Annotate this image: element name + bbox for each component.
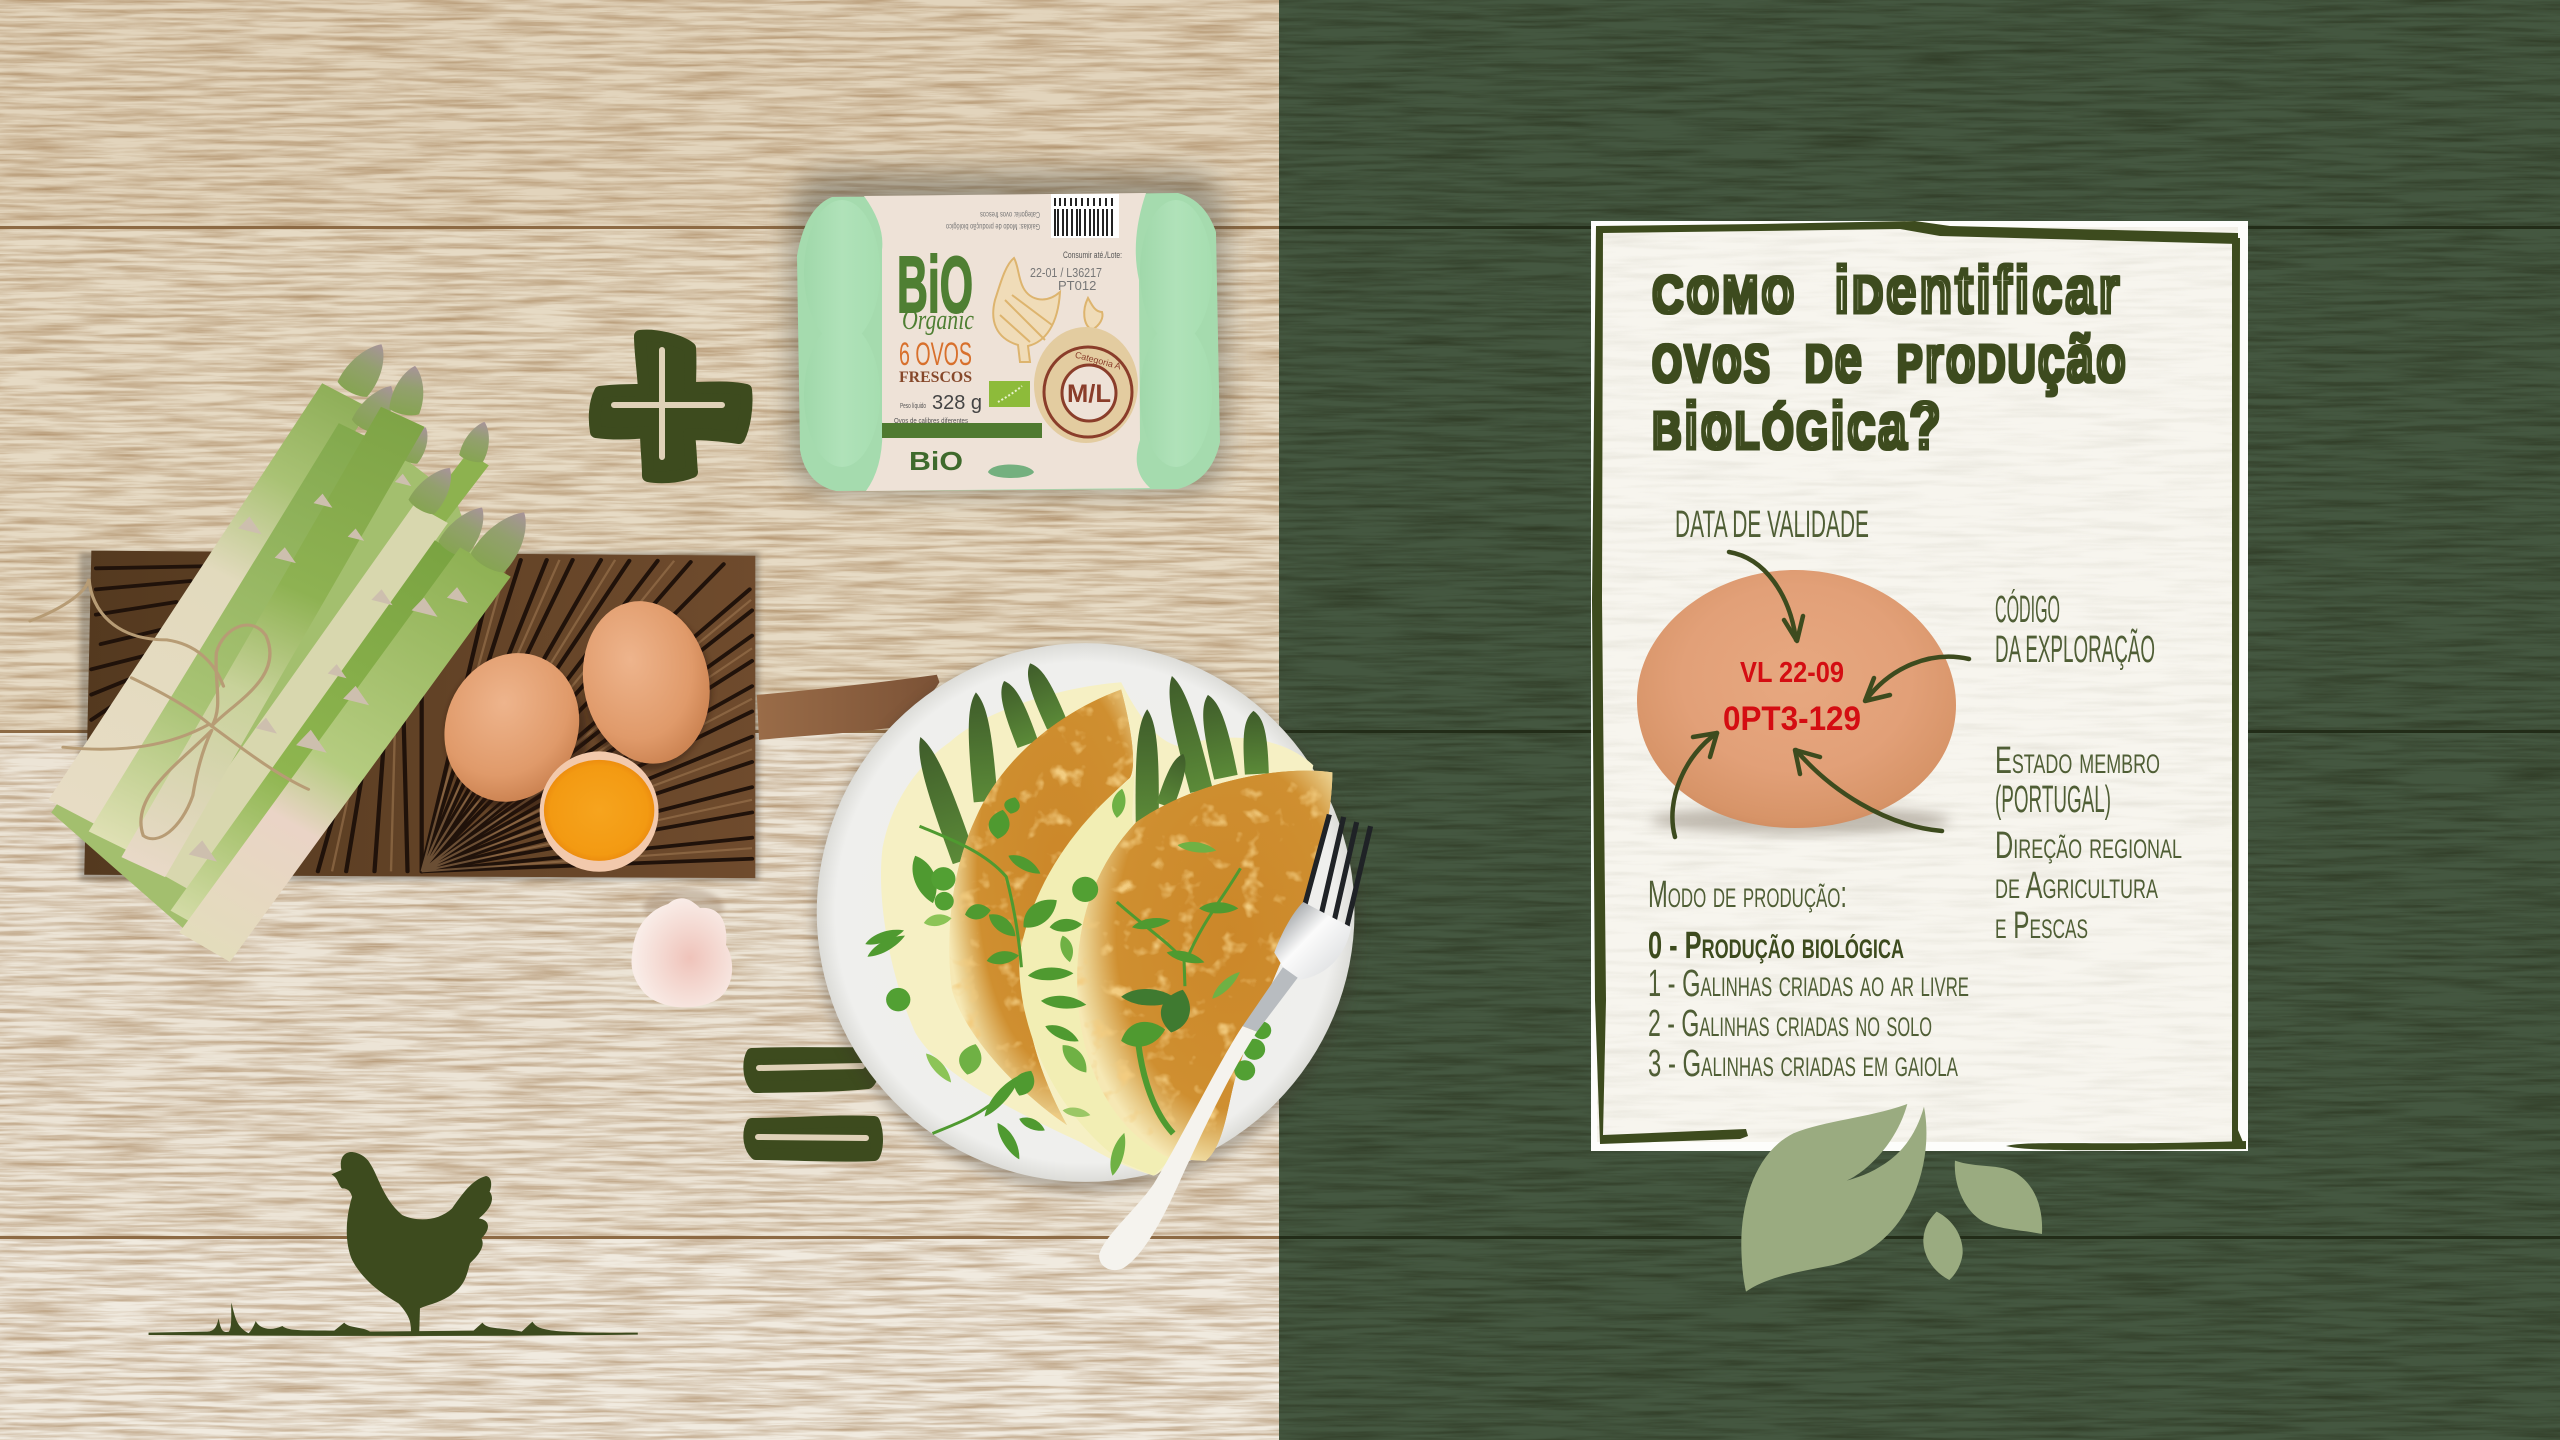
eggshell: [631, 898, 732, 1007]
plate: [813, 643, 1360, 1192]
arrows to egg code: [1672, 552, 1969, 837]
carton body: [797, 193, 1220, 491]
brand name: BiO: [897, 240, 973, 329]
arrow: production mode: [1672, 733, 1717, 837]
production mode legend: 2 - Galinhas criadas no solo: [1648, 1003, 1932, 1045]
arrow: member state: [1795, 750, 1942, 831]
arrow: validity date: [1729, 552, 1803, 641]
EU bio logo: [989, 381, 1030, 407]
production mode legend: Modo de produção:: [1648, 874, 1847, 916]
arrow: farm code: [1865, 657, 1969, 701]
omelette front fold: [1077, 771, 1332, 1161]
title: BioLÓGica?: [1652, 388, 1943, 464]
egg carton: 6 OVOS: [899, 336, 972, 372]
label: direção regional: de Agricultura: [1995, 865, 2158, 907]
peas: [886, 867, 1271, 1080]
category stamp: Categoria A: [1074, 350, 1122, 371]
label: direção regional: [1995, 825, 2182, 947]
production mode legend: 3 - Galinhas criadas em gaiola: [1648, 1043, 1958, 1085]
category stamp: [1034, 327, 1138, 443]
label: estado membro: Estado membro: [1995, 740, 2160, 782]
title: OVoS De ProDUção: [1652, 321, 2128, 397]
label: código da exploração: CÓDIGO: [1995, 588, 2060, 631]
fork: [1099, 814, 1371, 1270]
egg stamp: code: 0PT3-129: [1723, 700, 1861, 738]
asparagus tips on plate: [909, 659, 1269, 864]
egg carton: 328 g: [932, 392, 982, 414]
upside-down small print: Categoria: ovos frescos: [980, 210, 1040, 219]
wood background: light planks: [0, 0, 1279, 1440]
asparagus bunch: [51, 336, 541, 947]
carton domes: [804, 200, 1212, 467]
twine bow: [30, 579, 308, 839]
omelette middle fold: [1019, 776, 1206, 1176]
omelette left fold: [949, 689, 1133, 1125]
information panel: [1591, 221, 2248, 1151]
pale omelette base: [881, 682, 1313, 1176]
title: CoMo iDentificar: [1652, 252, 2122, 328]
hen silhouette on grass: [149, 1152, 638, 1336]
egg carton: 22-01 / L36217: [1030, 265, 1102, 280]
label: direção regional: e Pescas: [1995, 905, 2088, 947]
lower brand: BiO: [909, 446, 963, 476]
plus symbol: [595, 336, 747, 477]
production mode legend: 0 - Produção biológica: [1648, 925, 1904, 967]
eggshell shadow: [643, 888, 724, 926]
label: estado membro: (PORTUGAL): [1995, 779, 2111, 821]
eggs: [429, 594, 721, 813]
broken egg with yolk: [540, 751, 659, 872]
egg carton: FRESCOS: [899, 369, 972, 386]
carton shadow: [790, 172, 1226, 492]
hand-drawn border: [1592, 221, 2246, 1150]
production mode legend: 1 - Galinhas criadas ao ar livre: [1648, 963, 1969, 1005]
barcode: [1051, 194, 1119, 238]
label: direção regional: Direção regional: [1995, 825, 2182, 867]
upside-down small print: [946, 210, 1040, 231]
board handle: [757, 675, 939, 740]
egg carton: [790, 172, 1226, 492]
leaf icon: [1741, 1104, 2042, 1292]
label: código da exploração: [1995, 588, 2155, 671]
green stripe: [882, 423, 1042, 438]
egg carton: Peso líquido: [900, 403, 926, 410]
egg carton: Ovos de calibres diferentes: [894, 418, 968, 425]
egg stamp: date: VL 22-09: [1740, 657, 1844, 689]
label: estado membro: [1995, 740, 2160, 821]
wooden board: [80, 551, 759, 881]
egg carton: PT012: [1058, 278, 1096, 293]
plate with omelette: [757, 643, 1371, 1270]
herbs and scallions: [863, 788, 1243, 1177]
egg carton: Organic: [902, 305, 974, 336]
wood background: dark green planks: [1279, 0, 2560, 1440]
panel paper: [1591, 221, 2248, 1151]
title: [1652, 252, 2128, 464]
carton label: [864, 193, 1150, 491]
egg illustration: [1637, 570, 1956, 834]
equals symbol: [749, 1053, 877, 1156]
category stamp: M/L: [1067, 380, 1111, 408]
hen line drawing: [993, 258, 1103, 362]
information panel: DA EXPLORAÇÃO: [1995, 628, 2155, 671]
cutting board with eggs and asparagus: [30, 336, 759, 947]
date codes: Consumir até./Lote:: [1063, 250, 1122, 260]
label: data de validade: DATA DE VALIDADE: [1675, 504, 1869, 546]
production mode legend: [1648, 874, 1969, 1085]
upside-down small print: Gaiolas: Modo de produção biológico: [946, 222, 1040, 231]
